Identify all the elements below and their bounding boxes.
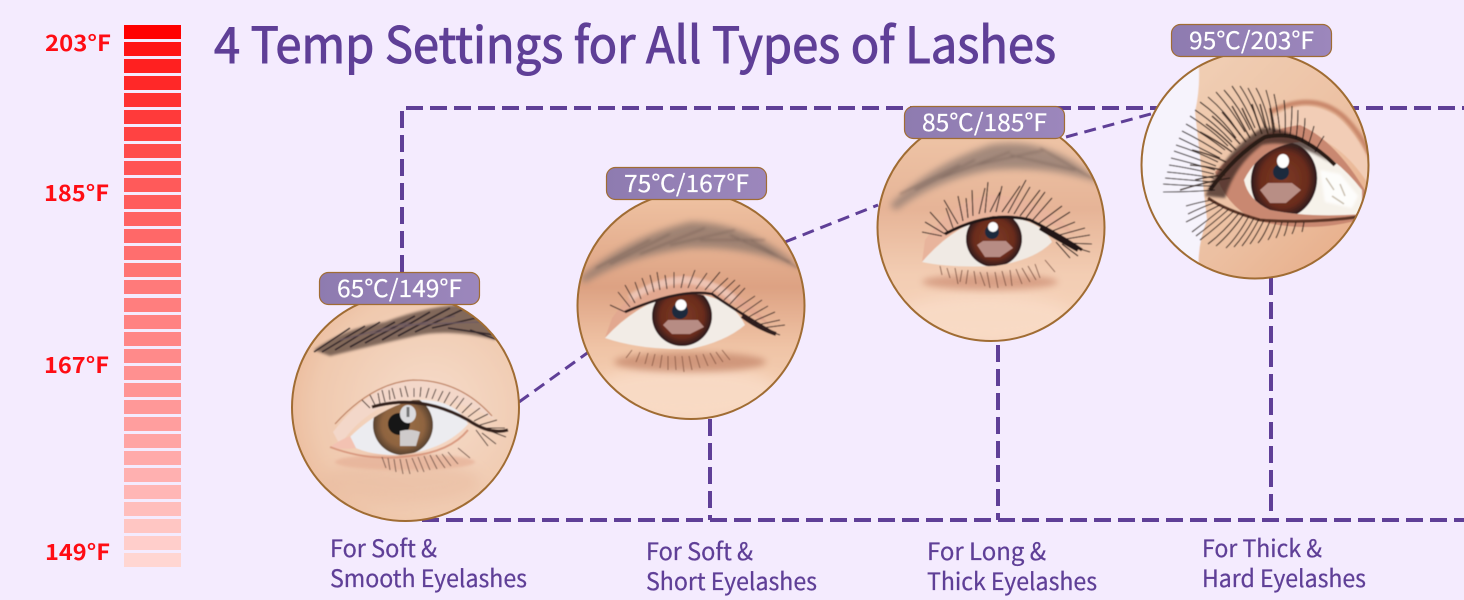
eyelid (922, 230, 949, 260)
upper lid fold (1274, 106, 1368, 182)
iris (373, 395, 433, 455)
temperature pill 85C: 85℃/185°F (922, 103, 1047, 138)
dark lash mass (1205, 128, 1330, 198)
caption: soft short (646, 532, 817, 597)
eye ring 3 (878, 114, 1104, 341)
caption: soft short: For Soft & (646, 532, 753, 567)
caption: long thick: Thick Eyelashes (927, 562, 1097, 597)
eyebrow (314, 304, 496, 356)
temperature pill 95C: 95℃/203°F (1189, 21, 1314, 56)
eye socket (1215, 125, 1366, 227)
eyelid (606, 284, 770, 336)
white backdrop at left (1142, 67, 1208, 262)
lower lashes (1186, 200, 1304, 248)
iris (652, 286, 712, 346)
temperature pill 65C: 65℃/149°F (337, 269, 462, 304)
caption: soft short: Short Eyelashes (646, 562, 817, 597)
temperature pill 75C: 75℃/167°F (624, 164, 749, 199)
iris (966, 211, 1022, 267)
iris (1250, 142, 1318, 215)
temperature scale labels: 203°F (45, 26, 111, 58)
lashes (625, 293, 772, 332)
caption: long thick: For Long & (927, 532, 1046, 567)
sclera glare (1320, 170, 1358, 208)
sclera (605, 293, 745, 349)
eye ring 4 (1142, 52, 1368, 278)
upper lashes (1163, 86, 1324, 192)
caption: soft smooth: Smooth Eyelashes (330, 559, 527, 594)
temperature scale labels: 167°F (44, 348, 109, 380)
eye ring 2 (578, 192, 804, 419)
temperature scale labels: 149°F (45, 535, 110, 567)
eyelid (333, 384, 493, 442)
caruncle (334, 436, 356, 448)
temperature scale labels (44, 26, 111, 567)
eye photo: 75C soft short lashes (575, 190, 807, 422)
title: 4 Temp Settings for All Types of Lashes (214, 6, 1056, 78)
eyebrow (580, 222, 800, 283)
lashes (945, 217, 1082, 250)
sclera (345, 400, 468, 455)
caption: thick hard: Hard Eyelashes (1202, 559, 1366, 594)
eye photo: 85C long thick lashes (878, 138, 1104, 340)
lower lash line (1208, 198, 1365, 221)
dashed connector lines (402, 108, 1464, 520)
heat scale bar (124, 25, 181, 567)
eye photo: 65C soft smooth lashes (293, 305, 518, 520)
caption: long thick (927, 532, 1097, 597)
sclera (1244, 142, 1362, 215)
caption: thick hard: For Thick & (1202, 529, 1322, 564)
temperature scale labels: 185°F (44, 176, 109, 208)
sclera (922, 216, 1052, 266)
eyebrow (890, 143, 1100, 210)
caption: thick hard (1202, 529, 1366, 594)
caption: soft smooth: For Soft & (330, 529, 437, 564)
upper lash line (1210, 135, 1335, 190)
lashes (372, 402, 508, 431)
eye photo: 95C thick hard lashes (1157, 57, 1368, 278)
eye ring 1 (292, 294, 519, 521)
caption: soft smooth (330, 529, 527, 594)
